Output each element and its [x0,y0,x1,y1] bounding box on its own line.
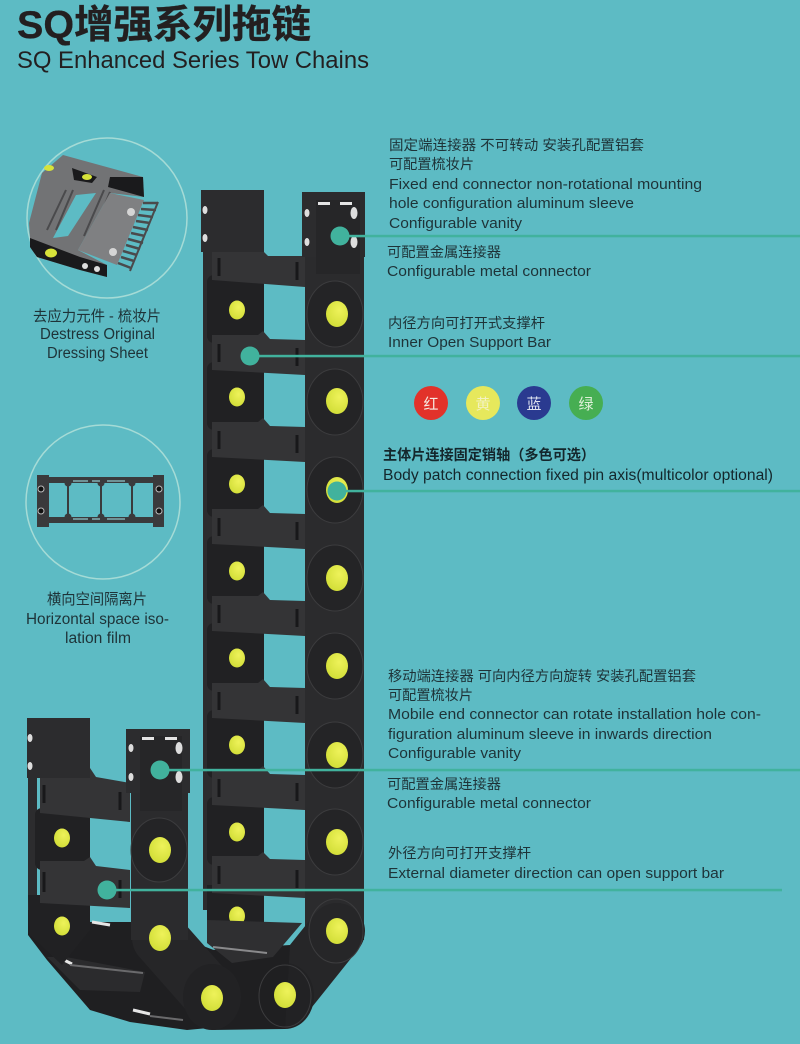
comb teeth [118,203,158,268]
text: isolation caption [26,591,169,647]
text: metal connector bottom [387,776,591,812]
text: metal connector top [387,244,591,280]
U-turn bend of the chain [28,899,363,1030]
icon: dressing sheet part [29,155,158,277]
left lobes [207,275,264,935]
text: mobile end connector [388,668,761,762]
tall tow chain [201,190,365,940]
top left block [201,190,264,252]
text: mobile end connector: Configurable vanity [388,745,522,762]
panel: horizontal isolation film inset [26,425,180,579]
text: isolation caption: Horizontal space iso- [26,611,169,628]
text: metal connector bottom: 可配置金属连接器 [387,776,501,792]
icon: isolation frame [37,475,164,527]
text: fixed end connector: 可配置梳妆片 [389,156,474,172]
blue: 蓝 [526,396,542,413]
short tow chain [27,718,190,965]
text: mobile end connector: 移动端连接器 可向内径方向旋转 安装孔配置铝套 [388,668,696,684]
text: isolation caption: lation film [65,630,131,647]
yellow: 黄 [475,396,491,413]
text: destress caption: 去应力元件 - 梳妆片 [33,307,161,325]
text: mobile end connector: figuration aluminum sleeve in inwards direction [388,726,712,743]
callout markers and leader lines [98,226,800,900]
text: destress caption: Destress Original [40,326,155,343]
green [569,386,603,420]
text: fixed end connector [389,137,702,232]
text: fixed end connector: Fixed end connector non-rotational mounting [389,176,702,193]
right pins [326,301,348,855]
blue [517,386,551,420]
text: isolation caption: 横向空间隔离片 [47,591,147,608]
text: body patch pin axis [383,446,773,484]
panel: destress dressing sheet inset [27,138,187,298]
top right connector [302,192,365,257]
text: inner support bar: 内径方向可打开式支撑杆 [388,315,545,331]
title: SQ增强系列拖链 [17,4,311,47]
side discs [307,281,363,875]
text: metal connector top: Configurable metal connector [387,263,591,280]
text: external support bar: 外径方向可打开支撑杆 [388,845,531,861]
text: fixed end connector: 固定端连接器 不可转动 安装孔配置铝套 [389,137,644,153]
text: external support bar: External diameter direction can open support bar [388,865,724,882]
text: fixed end connector: Configurable vanity [389,215,523,232]
left pins [229,300,245,926]
title: SQ Enhanced Series Tow Chains [17,47,369,74]
text: body patch pin axis: 主体片连接固定销轴（多色可选） [383,446,595,464]
text: mobile end connector: 可配置梳妆片 [388,687,473,703]
text: inner support bar [388,315,551,351]
bar clips [219,258,297,888]
yellow [466,386,500,420]
text: body patch pin axis: Body patch connection fixed pin axis(multicolor optional) [383,467,773,484]
text: external support bar [388,845,724,882]
title [17,4,369,74]
text: destress caption: Dressing Sheet [47,345,149,362]
green: 绿 [578,396,594,413]
red: 红 [423,396,439,413]
text: metal connector top: 可配置金属连接器 [387,244,501,260]
text: metal connector bottom: Configurable metal connector [387,795,591,812]
text: mobile end connector: Mobile end connector can rotate installation hole con- [388,706,761,723]
text: destress caption [33,307,161,362]
red [414,386,448,420]
legend: pin colours [414,386,603,420]
text: fixed end connector: hole configuration aluminum sleeve [389,195,634,212]
text: inner support bar: Inner Open Support Bar [388,334,551,351]
middle crossbar [207,920,302,963]
crossbars [212,250,305,898]
